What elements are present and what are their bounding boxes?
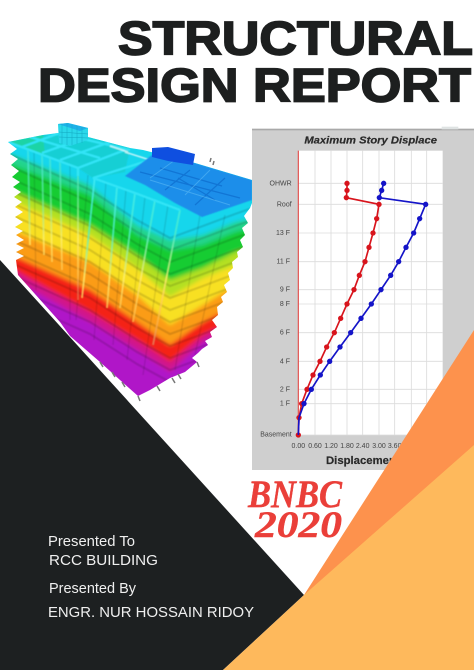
presentation details: ENGR. NUR HOSSAIN RIDOY <box>48 605 254 621</box>
black corner shape <box>0 260 304 670</box>
story axis labels: 2 F <box>280 386 290 393</box>
column lines <box>28 150 78 300</box>
badge: BNBC 2020: 2020 <box>254 505 342 546</box>
story axis labels: 9 F <box>280 287 290 294</box>
left wing roof frame <box>8 132 180 210</box>
displacement axis labels: 0.60 <box>308 443 322 450</box>
badge: BNBC 2020: BNBC <box>247 473 343 516</box>
story axis labels: 13 F <box>276 230 290 237</box>
presentation details <box>48 534 254 621</box>
3D building model <box>0 120 260 401</box>
base supports <box>100 158 214 401</box>
chart title: Maximum Story Displace <box>304 135 438 146</box>
displacement axis labels: 3.00 <box>372 443 386 450</box>
blue roof slab <box>125 155 252 217</box>
chart: maximum story displacement <box>252 127 474 470</box>
displacement axis labels: 1.80 <box>340 443 354 450</box>
icon: rooftop water tank, right <box>152 147 195 165</box>
displacement axis labels: 1.20 <box>324 443 338 450</box>
title: STRUCTURAL <box>118 12 473 66</box>
displacement axis labels <box>292 443 402 450</box>
chart panel <box>252 129 474 470</box>
colour bands <box>8 133 252 396</box>
badge: BNBC 2020 <box>247 473 343 546</box>
story axis labels: 4 F <box>280 358 290 365</box>
displacement axis labels: 3.60 <box>388 443 402 450</box>
story axis labels: 11 F <box>277 259 290 266</box>
story axis labels: Basement <box>260 432 292 439</box>
minor grid <box>34 150 225 375</box>
blue series <box>298 181 428 435</box>
icon: rooftop water tank, left <box>58 123 88 146</box>
story axis labels: 1 F <box>280 401 290 408</box>
axis title: Displacement <box>326 455 400 467</box>
story axis labels: Roof <box>277 201 292 208</box>
presentation details: RCC BUILDING <box>49 553 158 569</box>
title: DESIGN REPORT <box>38 60 471 112</box>
title <box>38 12 473 112</box>
red series <box>296 181 382 438</box>
presentation details: Presented To <box>48 534 135 550</box>
yellow corner shape <box>223 445 474 670</box>
displacement axis labels: 0.00 <box>292 443 305 450</box>
presentation details: Presented By <box>49 581 137 597</box>
story axis labels: 8 F <box>280 301 290 308</box>
orange corner shape <box>304 330 474 670</box>
story axis labels <box>260 180 292 439</box>
plot area <box>298 151 443 435</box>
story axis labels: OHWR <box>270 180 292 187</box>
displacement axis labels: 2.40 <box>356 443 370 450</box>
story axis labels: 6 F <box>280 330 290 337</box>
floor stripes <box>5 152 258 382</box>
